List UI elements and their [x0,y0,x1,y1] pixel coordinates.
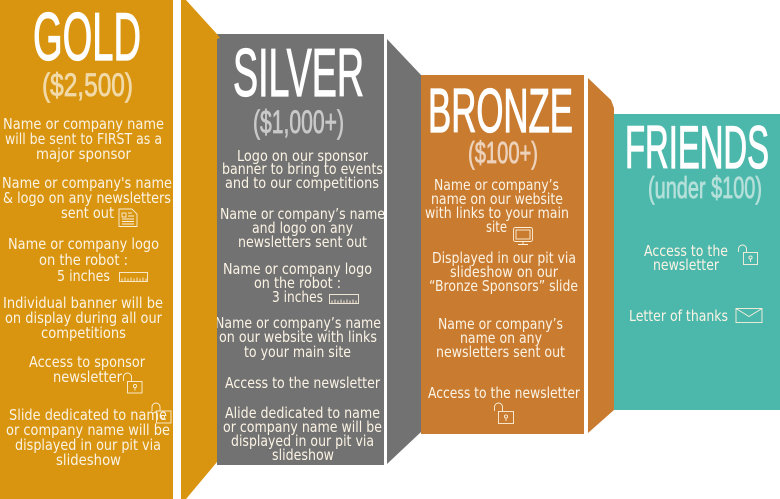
text block: newsletter access [644,242,728,274]
text block: slideshow [429,249,578,295]
panel: gold [0,0,173,499]
panel: friends [612,114,780,410]
text block: newsletter access: newsletter [653,256,720,274]
panel: bronze side [588,78,614,433]
text block: sponsor banner: and to our competitions [225,174,379,192]
text block: slideshow: “Bronze Sponsors” slide [429,277,578,295]
text block: name and logo on newsletters: Name or company's name [2,174,172,192]
heading: silver: SILVER [233,35,364,111]
text block: logo on robot: on the robot : [254,274,341,292]
text block: name on website: Name or company’s name [215,314,381,332]
panel: silver [215,34,385,465]
text block: name and logo on newsletters [220,205,385,251]
text block: individual banner: competitions [41,324,126,342]
text block: sent to FIRST: Name or company name [3,115,164,133]
text block: newsletter access: Access to the [644,242,728,260]
text block: name and logo on newsletters: and logo on any [252,219,353,237]
text block: name on website: to your main site [244,343,351,361]
text block: name on newsletters [436,315,565,361]
text block: dedicated slide: Alide dedicated to name [225,404,380,422]
text block: dedicated slide: slideshow [272,446,334,464]
price: $2,500: ($2,500) [42,67,133,103]
text block: slideshow: slideshow on our [450,263,559,281]
text block: logo on robot: Name or company logo [223,260,372,278]
text block: sent to FIRST: major sponsor [36,145,132,163]
text block: dedicated slide: displayed in our pit via [231,432,374,450]
price: $1,000+: ($1,000+) [253,104,344,140]
text block: newsletter access: newsletter [53,368,123,386]
panel: gold side [181,0,220,499]
text block: sent to FIRST: will be sent to FIRST as a [5,130,162,148]
text block: name on website: Name or company’s [434,176,559,194]
icon: envelope [736,308,762,322]
icon: lock [152,403,171,423]
text block: dedicated slide [223,404,382,464]
text block: name on website: site [486,218,507,236]
text block: name on website [425,176,569,236]
text block: logo on robot: on the robot : [39,251,128,269]
heading: bronze: BRONZE [428,77,573,146]
heading: gold: GOLD [33,0,141,75]
text block: logo on robot [8,235,159,285]
text block: individual banner: on display during all our [5,309,163,327]
text block: name on website [215,314,381,361]
icon: newsletter [119,209,137,226]
text block: individual banner: Individual banner will be [3,294,163,312]
text block: sponsor banner: banner to bring to events [222,160,383,178]
text block: name and logo on newsletters: newsletters sent out [238,233,367,251]
text block: sponsor banner: Logo on our sponsor [237,147,369,165]
panel: bronze [421,75,584,434]
text block: logo on robot: 3 inches [272,288,323,306]
text block: name on newsletters: Name or company’s [438,315,563,333]
text block: name on website: on our website with links [219,328,377,346]
text block: dedicated slide: Slide dedicated to name [9,406,167,424]
text block: newsletter access [29,353,146,386]
text block: dedicated slide [6,406,170,469]
text block: sponsor banner [222,147,383,192]
text block: name on newsletters: name on any [460,329,542,347]
text block: newsletter access: Access to the newsletter [428,384,581,402]
text block: sent to FIRST [3,115,164,163]
icon: ruler [120,272,148,282]
text block: dedicated slide: slideshow [56,451,121,469]
text block: name and logo on newsletters: sent out [61,204,114,222]
icon: lock [738,245,758,264]
text block: newsletter access: Access to the newsletter [225,374,381,392]
text block: dedicated slide: or company name will be [6,421,170,439]
text block: name and logo on newsletters: & logo on any newsletters [3,189,171,207]
text block: name and logo on newsletters: Name or company’s name [220,205,385,223]
icon: ruler [330,294,358,304]
price: $100+: ($100+) [468,135,538,170]
text block: name and logo on newsletters [2,174,172,222]
text block: newsletter access: Access to sponsor [29,353,146,371]
text block: name on website: with links to your main [425,204,569,222]
text block: logo on robot [223,260,372,306]
text block: slideshow: Displayed in our pit via [432,249,576,267]
icon: lock [494,403,514,424]
panel: silver side [387,39,421,464]
text block: logo on robot: Name or company logo [8,235,159,253]
text block: dedicated slide: or company name will be [223,418,382,436]
text block: logo on robot: 5 inches [57,267,110,285]
text block: individual banner [3,294,163,342]
text block: name on newsletters: newsletters sent out [436,343,565,361]
text block: name on website: name on our website [431,190,563,208]
icon: monitor [514,228,532,244]
icon: lock [124,373,142,393]
text block: letter of thanks: Letter of thanks [629,307,728,325]
text block: dedicated slide: displayed in our pit via [15,436,161,454]
